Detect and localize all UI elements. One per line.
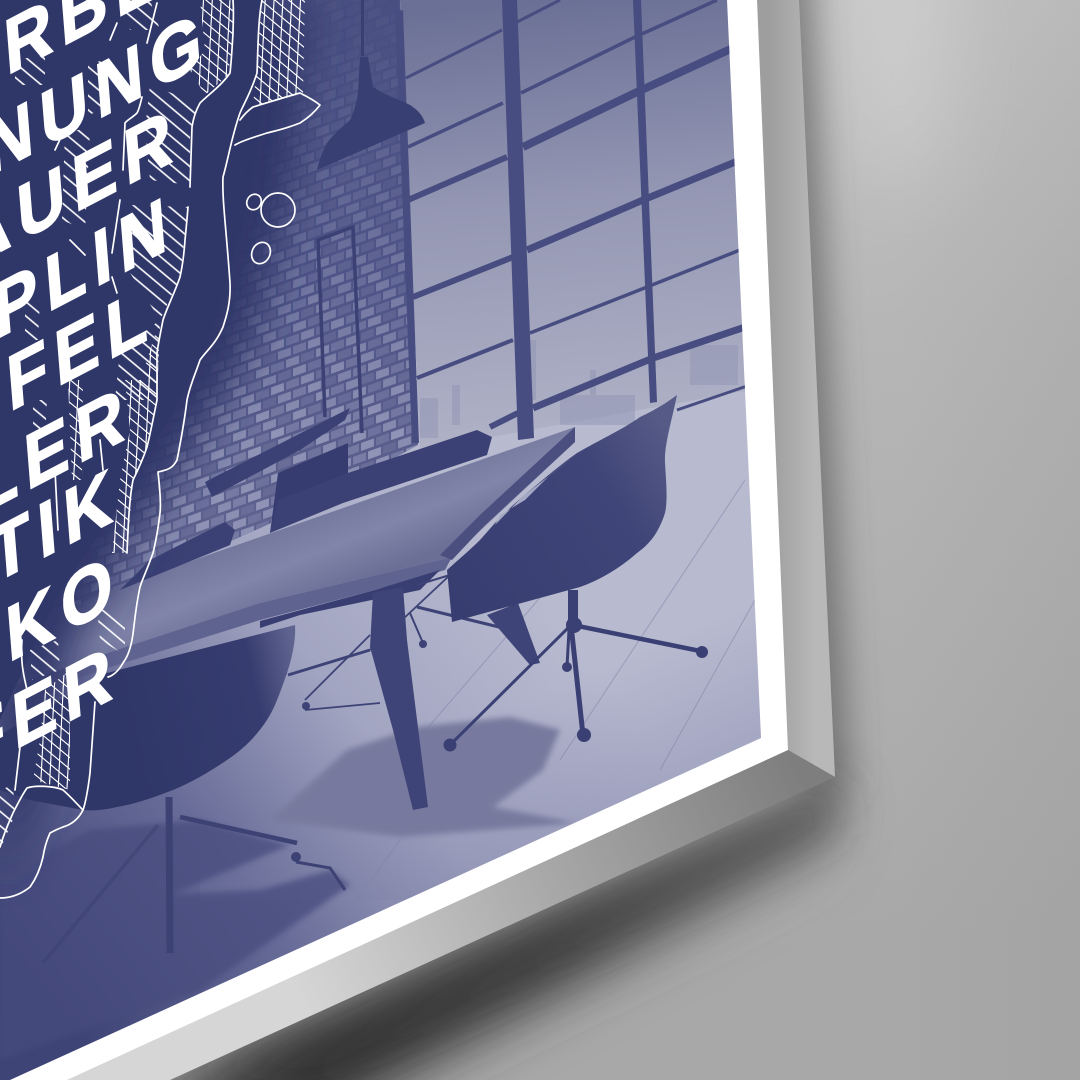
photo: floor edge shade xyxy=(406,659,761,900)
white poster border xyxy=(0,0,788,1080)
photo: pendant lamp xyxy=(317,0,425,170)
photo: rolled object xyxy=(270,430,492,533)
word: FEL: FEL xyxy=(4,266,157,428)
photo: wall pipe xyxy=(318,227,362,433)
photo: window mullions xyxy=(395,0,750,443)
photo: table legs xyxy=(370,587,540,810)
photo: brick wall xyxy=(88,0,418,597)
frame: right side face xyxy=(757,0,835,777)
photo: city silhouette xyxy=(420,340,738,438)
poster word list xyxy=(0,0,200,748)
photo: window panes xyxy=(400,0,750,450)
photo: shelf xyxy=(205,408,350,497)
contour area hatching xyxy=(0,0,305,850)
frame drop shadow xyxy=(100,778,840,1080)
photo: floor shadow right xyxy=(270,717,577,837)
dark blue overlay xyxy=(0,0,312,880)
photo: books xyxy=(270,443,348,533)
line hatch xyxy=(0,0,198,850)
white contour lines xyxy=(0,0,320,898)
wall shadow right of frame xyxy=(760,0,848,800)
poster picture xyxy=(0,0,780,1080)
photo: floor xyxy=(0,380,780,1080)
grid hatch top xyxy=(33,0,305,790)
photo: floor shadow left xyxy=(58,818,350,996)
photo: right chair xyxy=(444,395,708,752)
photo: dark object behind text xyxy=(120,522,235,590)
frame: bottom side face xyxy=(67,750,835,1080)
photo: rear chair legs xyxy=(288,575,503,710)
photo: floor plank lines xyxy=(333,480,755,933)
photo: left chair xyxy=(0,625,345,963)
photo: table xyxy=(62,427,575,676)
